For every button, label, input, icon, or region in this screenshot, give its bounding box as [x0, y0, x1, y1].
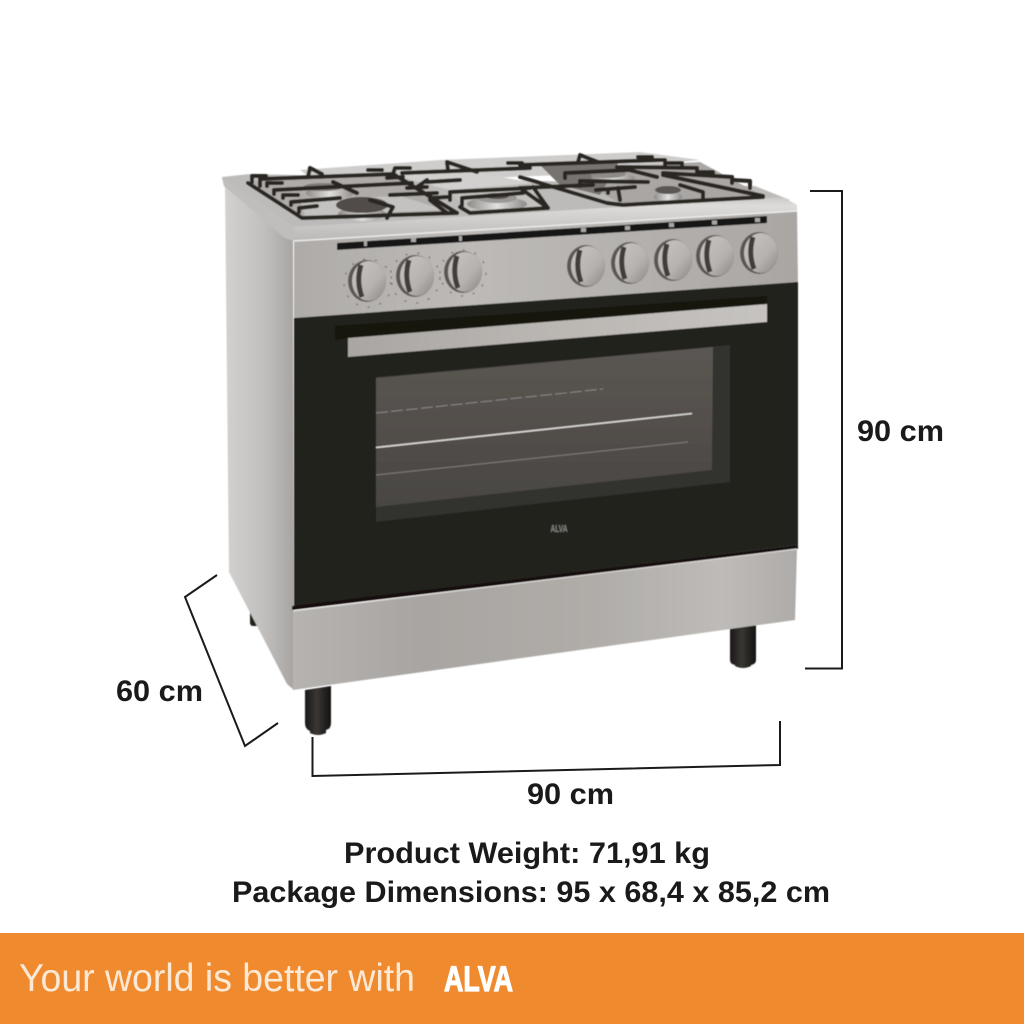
oven rack lower — [376, 442, 688, 475]
strip symbols — [364, 218, 760, 246]
knob 7 — [696, 235, 734, 277]
left pan support — [248, 168, 457, 218]
side panel — [225, 187, 294, 690]
right pan support — [520, 155, 763, 208]
rear burner left — [303, 183, 354, 199]
footer band — [0, 933, 1024, 1024]
control strip — [337, 216, 767, 250]
back leg — [250, 602, 262, 626]
control panel — [294, 210, 798, 318]
lip left face — [222, 177, 294, 241]
knob 2 — [390, 253, 440, 303]
plinth drawer — [292, 545, 798, 690]
knob 4 — [567, 245, 605, 287]
pan supports — [248, 155, 763, 218]
front burner right — [654, 186, 682, 203]
knob 3 — [440, 250, 486, 296]
width dimension bracket — [312, 721, 780, 776]
tagline: Your world is better with — [19, 957, 415, 1000]
rear burner right — [590, 170, 635, 183]
oven door — [294, 282, 798, 606]
front lip — [222, 177, 797, 241]
front left leg — [305, 686, 331, 735]
depth dimension bracket — [185, 575, 278, 746]
brand logo: ALVA — [444, 960, 513, 999]
burner wells — [248, 160, 763, 219]
centre burner — [467, 193, 527, 211]
door handle — [348, 304, 767, 357]
front right leg — [730, 620, 756, 668]
height label: 90 cm — [857, 415, 944, 448]
knobs — [344, 232, 778, 307]
oven rack upper — [376, 389, 603, 413]
front burner left — [336, 197, 388, 221]
package dimensions: Package Dimensions: 95 x 68,4 x 85,2 cm — [232, 876, 830, 909]
oven rack middle — [376, 414, 692, 448]
product weight: Product Weight: 71,91 kg — [344, 837, 710, 870]
knob 6 — [654, 239, 692, 281]
window glass — [376, 347, 713, 507]
door logo: ALVA — [550, 524, 568, 535]
knob 5 — [611, 242, 649, 284]
depth label: 60 cm — [116, 675, 203, 708]
centre pan support — [393, 162, 548, 213]
white panel edge — [294, 211, 797, 241]
knob 8 — [740, 232, 778, 274]
door top shadow — [335, 296, 767, 340]
width label: 90 cm — [527, 778, 614, 811]
height dimension bracket — [805, 191, 842, 668]
knob 1 — [344, 259, 392, 307]
cooktop deck — [222, 174, 790, 228]
window frame — [376, 345, 730, 522]
rear splash plate — [300, 152, 700, 185]
cooker product illustration — [222, 152, 798, 735]
